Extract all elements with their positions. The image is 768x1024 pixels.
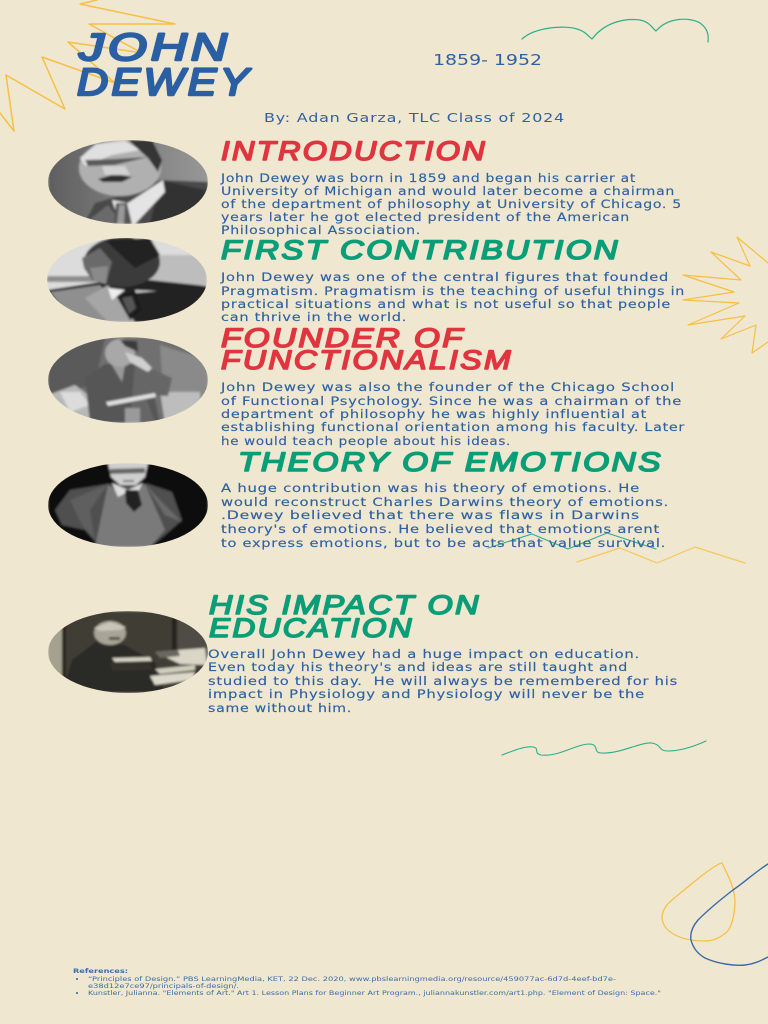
photo: Dewey in three-piece suit: [48, 463, 208, 547]
body text: to express emotions, but to be acts that value survival.: [221, 536, 666, 550]
body text: establishing functional orientation among his faculty. Later: [221, 420, 685, 434]
body text: can thrive in the world.: [221, 310, 407, 324]
photo: Dewey in profile: [47, 237, 207, 322]
references: “Principles of Design.” PBS LearningMedia, KET, 22 Dec. 2020, www.pbslearningmedia.org/resource/459077ac-6d7d-4eef-bd7e-: [88, 976, 616, 983]
body text: University of Michigan and would later become a chairman: [221, 184, 675, 198]
heading: [209, 590, 481, 643]
body text: [220, 171, 682, 237]
photo: Dewey seated in armchair: [48, 337, 208, 423]
references: [73, 968, 661, 997]
body text: John Dewey was also the founder of the Chicago School: [220, 380, 675, 394]
heading: FOUNDER OF: [221, 323, 465, 353]
title: [77, 27, 252, 104]
body text: would reconstruct Charles Darwins theory of emotions.: [221, 495, 669, 509]
panel: first contribution: [47, 235, 685, 324]
decoration: yellow starburst right: [683, 237, 768, 353]
body text: John Dewey was born in 1859 and began his carrier at: [220, 171, 636, 185]
decoration: blue loop: [691, 864, 768, 965]
body text: [220, 380, 685, 448]
body text: Pragmatism. Pragmatism is the teaching of useful things in: [221, 284, 685, 298]
body text: [220, 270, 685, 324]
body text: studied to this day. He will always be remembered for his: [208, 674, 678, 688]
body text: .Dewey believed that there was flaws in Darwins: [221, 508, 640, 522]
title: DEWEY: [77, 62, 252, 104]
body text: department of philosophy he was highly influential at: [221, 407, 647, 421]
heading: EDUCATION: [209, 613, 414, 643]
body text: of the department of philosophy at University of Chicago. 5: [221, 197, 682, 211]
body text: theory's of emotions. He believed that emotions arent: [221, 522, 660, 536]
photo: Dewey at his desk: [48, 611, 208, 693]
heading: THEORY OF EMOTIONS: [238, 447, 663, 477]
references: References:: [73, 968, 128, 975]
heading: FUNCTIONALISM: [221, 345, 513, 375]
decoration: green arc line top right: [522, 19, 708, 42]
panel: introduction: [48, 136, 682, 237]
panel: his impact on education: [48, 590, 678, 715]
decoration: yellow loop: [662, 863, 735, 941]
panel: theory of emotions: [48, 447, 669, 550]
decoration: green wave: [502, 741, 706, 755]
body text: impact in Physiology and Physiology will never be the: [208, 687, 645, 701]
byline: By: Adan Garza, TLC Class of 2024: [264, 110, 565, 125]
body text: Overall John Dewey had a huge impact on education.: [208, 647, 640, 661]
body text: Philosophical Association.: [221, 223, 421, 237]
body text: [208, 647, 678, 715]
body text: of Functional Psychology. Since he was a chairman of the: [221, 394, 682, 408]
heading: HIS IMPACT ON: [209, 590, 481, 620]
decoration: yellow zigzag: [577, 547, 745, 563]
photo: Dewey portrait with glasses: [48, 140, 208, 224]
body text: years later he got elected president of the American: [221, 210, 630, 224]
heading: INTRODUCTION: [221, 136, 487, 166]
body text: same without him.: [208, 701, 352, 715]
body text: A huge contribution was his theory of emotions. He: [221, 481, 640, 495]
body text: practical situations and what is not useful so that people: [221, 297, 671, 311]
decoration: yellow zigzag top left: [0, 0, 175, 131]
body text: he would teach people about his ideas.: [221, 434, 511, 448]
references: Kunstler, Julianna. "Elements of Art." Art 1. Lesson Plans for Beginner Art Program., juliannakunstler.com/art1.php. "Element of Design: Space.": [88, 990, 661, 997]
panel: founder of functionalism: [48, 323, 685, 448]
decoration: green zigzag over text: [488, 533, 656, 549]
dates: 1859- 1952: [433, 51, 542, 69]
references: e38d12e7ce97/principals-of-design/.: [88, 983, 239, 990]
body text: Even today his theory's and ideas are still taught and: [208, 660, 628, 674]
heading: FIRST CONTRIBUTION: [221, 235, 620, 265]
heading: [221, 323, 513, 375]
title: JOHN: [78, 27, 231, 69]
body text: [221, 481, 669, 550]
body text: John Dewey was one of the central figures that founded: [220, 270, 669, 284]
